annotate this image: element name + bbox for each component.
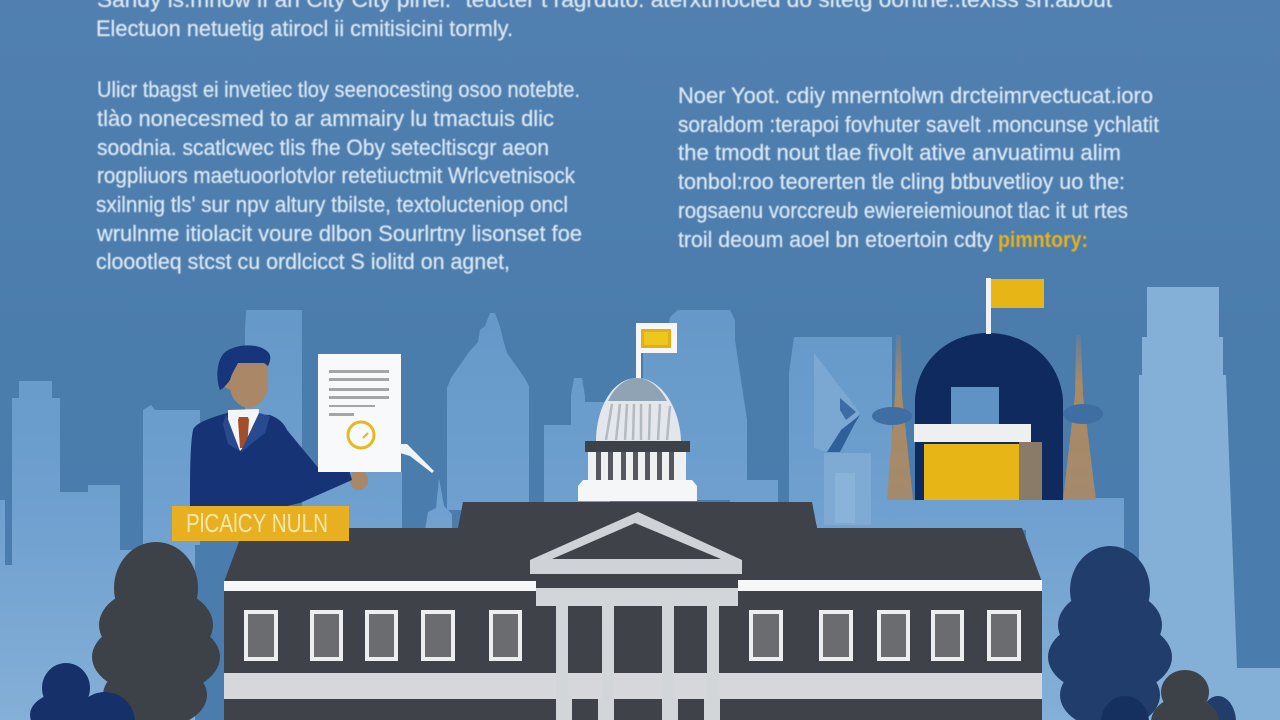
- right text column: soraldom :terapoi fovhuter savelt .moncunse ychlatit: [678, 112, 1159, 137]
- person: head: [230, 362, 268, 408]
- person: shirt and tie: [228, 409, 259, 451]
- tree: right large: [1048, 546, 1172, 720]
- pediment: [530, 512, 742, 574]
- flag: capitol: [636, 323, 677, 380]
- person: torso and arm: [190, 413, 352, 510]
- yellow block: [924, 444, 1019, 500]
- seal: [348, 422, 374, 448]
- right text column: pimntory:: [998, 227, 1088, 252]
- left text column: soodnia. scatlcwec tlis fhe Oby setecltiscgr aeon: [97, 135, 549, 160]
- pointer: [400, 444, 434, 473]
- person: hand: [350, 470, 368, 490]
- document with seal: [318, 354, 401, 472]
- intro text block: [96, 0, 1112, 41]
- left text column: Ulicr tbagst ei invetiec tloy seenocesting osoo notebte.: [97, 77, 580, 102]
- entablature: [536, 588, 738, 606]
- spires with discs, right tower: [872, 335, 1103, 500]
- right text column: rogsaenu vorccreub ewiereiemiounot tlac it ut rtes: [678, 198, 1128, 223]
- cornice stripes: [224, 581, 536, 591]
- tree: left small: [30, 663, 135, 720]
- yellow label: PlCAlCY NULN: [186, 508, 328, 538]
- right text column: tonbol:roo teorerten tle cling btbuvetlioy uo the:: [678, 169, 1125, 194]
- left text column: wrulnme itiolacit voure dlbon Sourlrtny lisonset foe: [96, 221, 582, 246]
- left text column: tlào nonecesmed to ar ammairy lu tmactuis dlic: [97, 106, 554, 131]
- tan panel: [1019, 442, 1042, 500]
- intro text block: Electuon netuetig atirocl ii cmitisicini tormly.: [96, 16, 513, 41]
- person holding document: [190, 345, 368, 510]
- flag: dome arch: [986, 278, 1044, 334]
- skyline: large tower, right: [1139, 287, 1280, 720]
- white lintel: [914, 424, 1031, 442]
- left text column: sxilnnig tls' sur npv altury tbilste, textolucteniop oncl: [96, 192, 568, 217]
- windows right: [751, 612, 1019, 659]
- horizontal band: [224, 673, 1042, 699]
- right text column: [678, 83, 1159, 252]
- left text column: rogpliuors maetuoorlotvlor retetiuctmit Wrlcvetnisock: [97, 163, 576, 188]
- right text column: the tmodt nout tlae fivolt ative anvuatimu alim: [678, 140, 1121, 165]
- left text column: cloootleq stcst cu ordlcicct S iolitd on agnet,: [96, 249, 510, 274]
- windows left: [246, 612, 520, 659]
- upper roof: [224, 502, 1042, 720]
- left text column: [96, 77, 582, 274]
- tree: right small dark: [1151, 670, 1219, 720]
- columns: [556, 606, 720, 720]
- right text column: troil deoum aoel bn etoertoin cdty: [678, 227, 993, 252]
- skyline: flag on building: [814, 353, 871, 525]
- right text column: Noer Yoot. cdiy mnerntolwn drcteimrvectucat.ioro: [678, 83, 1153, 108]
- skyline: buildings: [0, 310, 1124, 720]
- tree: left large: [92, 542, 220, 720]
- dome arch building: [914, 333, 1063, 500]
- tree: right small navy: [1101, 696, 1149, 720]
- tree: right far navy: [1200, 696, 1236, 720]
- main civic building: [224, 502, 1042, 720]
- capitol dome: [578, 323, 697, 501]
